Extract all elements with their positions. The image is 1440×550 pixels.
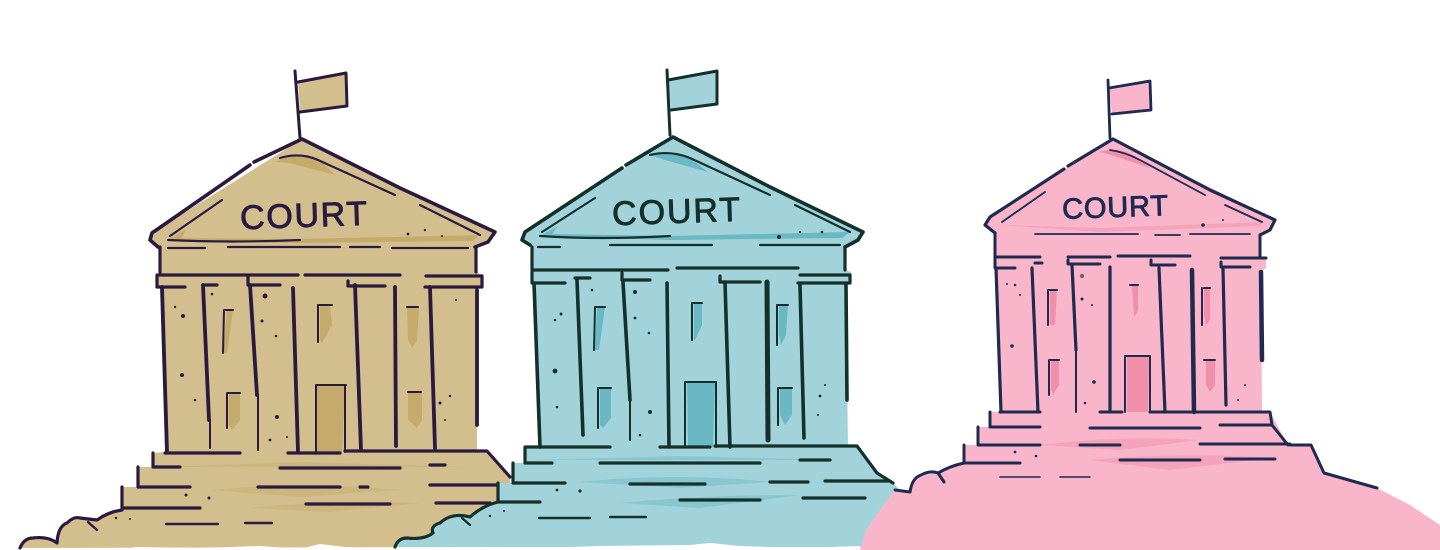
building: pink court (860, 80, 1440, 550)
teal shading (540, 152, 850, 447)
pink outlines (895, 139, 1377, 492)
court label: teal: COURT (611, 191, 741, 233)
pink hill and building silhouette (860, 139, 1440, 550)
building: teal court (395, 70, 900, 547)
pink speckles (1006, 219, 1246, 457)
pink shading (1050, 150, 1215, 412)
teal step shading (532, 456, 840, 508)
building: tan court (20, 71, 510, 548)
teal flag (667, 70, 717, 135)
court label: tan: COURT (239, 195, 368, 237)
tan speckles (115, 229, 457, 520)
tan shading (168, 155, 480, 452)
tan step shading (160, 462, 470, 512)
teal speckles (489, 231, 826, 517)
tan silhouette (20, 139, 510, 548)
pink flag (1108, 80, 1151, 138)
tan outlines (20, 139, 510, 548)
torn white paper edge at bottom (125, 543, 860, 550)
teal outlines (395, 137, 893, 547)
pink step shading (1000, 222, 1270, 470)
teal silhouette (395, 137, 900, 547)
tan flag (295, 71, 347, 138)
court label: pink: COURT (1062, 190, 1169, 226)
